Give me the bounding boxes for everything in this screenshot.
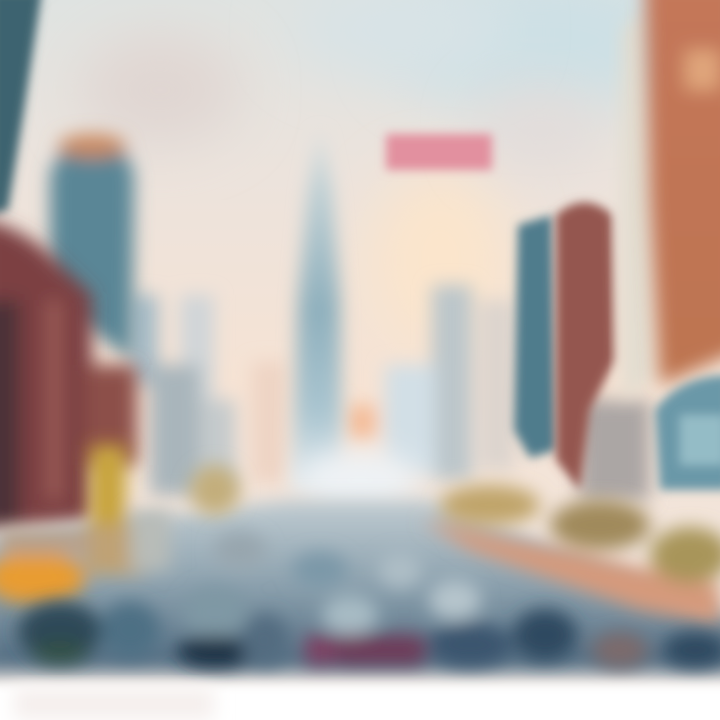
right brown tower bbox=[556, 202, 615, 490]
left yellow signage bbox=[0, 445, 170, 604]
right pale column bbox=[622, 10, 655, 400]
right blue tower bbox=[514, 215, 556, 458]
right blue storefront bbox=[655, 375, 720, 490]
distant pale buildings bbox=[130, 285, 650, 500]
right orange high-rise bbox=[645, 0, 720, 385]
cars in traffic bbox=[18, 532, 720, 668]
central tall tower bbox=[292, 130, 342, 490]
left round blue tower bbox=[50, 134, 134, 360]
street and road bbox=[0, 500, 720, 672]
glow at street vanishing point bbox=[300, 450, 420, 510]
left red brick buildings bbox=[0, 218, 137, 530]
right pavement with trees bbox=[190, 465, 720, 625]
white bottom strip bbox=[0, 684, 720, 720]
pink sign in the sky bbox=[386, 134, 492, 170]
left dark top tower bbox=[0, 0, 42, 215]
